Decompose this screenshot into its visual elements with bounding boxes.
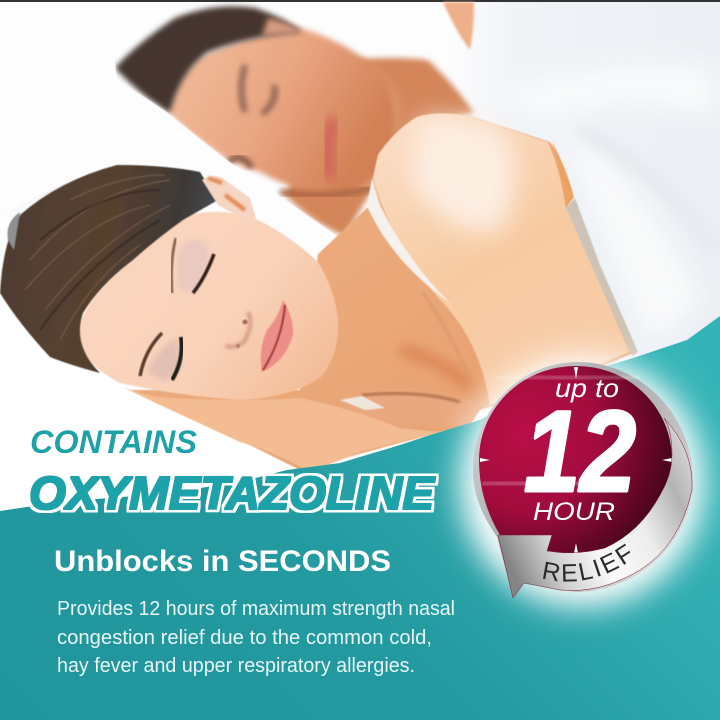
dial highlights bbox=[480, 367, 672, 553]
woman's body bbox=[123, 114, 638, 472]
bra strap bbox=[367, 178, 451, 304]
badge glow bbox=[460, 357, 704, 607]
lips bbox=[261, 300, 293, 372]
man's shoulder bbox=[443, 2, 474, 50]
nose bbox=[226, 312, 250, 347]
heading: oxymetazoline: OXYMETAZOLINE bbox=[29, 467, 435, 519]
woman's face bbox=[77, 212, 338, 400]
eyes bbox=[177, 239, 209, 292]
teal torn banner bbox=[0, 316, 720, 720]
body text bbox=[57, 598, 455, 677]
pillow between the couple bbox=[0, 20, 338, 252]
body text: hay fever and upper respiratory allergies. bbox=[57, 655, 415, 677]
man bbox=[115, 6, 474, 236]
relief: RELIEF bbox=[543, 544, 630, 582]
red dial bbox=[479, 366, 672, 553]
body text: congestion relief due to the common cold, bbox=[57, 627, 432, 649]
badge: up to 12 hour relief bbox=[473, 362, 693, 598]
silver outer ring bbox=[473, 362, 693, 598]
subheading: Unblocks in SECONDS bbox=[54, 545, 391, 578]
arm bbox=[123, 387, 440, 472]
12: 12 bbox=[524, 388, 636, 516]
lower pillow bbox=[0, 290, 320, 520]
heading: contains: CONTAINS bbox=[30, 424, 198, 460]
woman's ear bbox=[202, 176, 256, 218]
hour: HOUR bbox=[533, 498, 615, 526]
woman's hair bbox=[0, 165, 218, 373]
up to: up to bbox=[555, 373, 619, 403]
silver ribbon with pointer bbox=[498, 418, 692, 598]
body text: Provides 12 hours of maximum strength nasal bbox=[57, 598, 455, 620]
